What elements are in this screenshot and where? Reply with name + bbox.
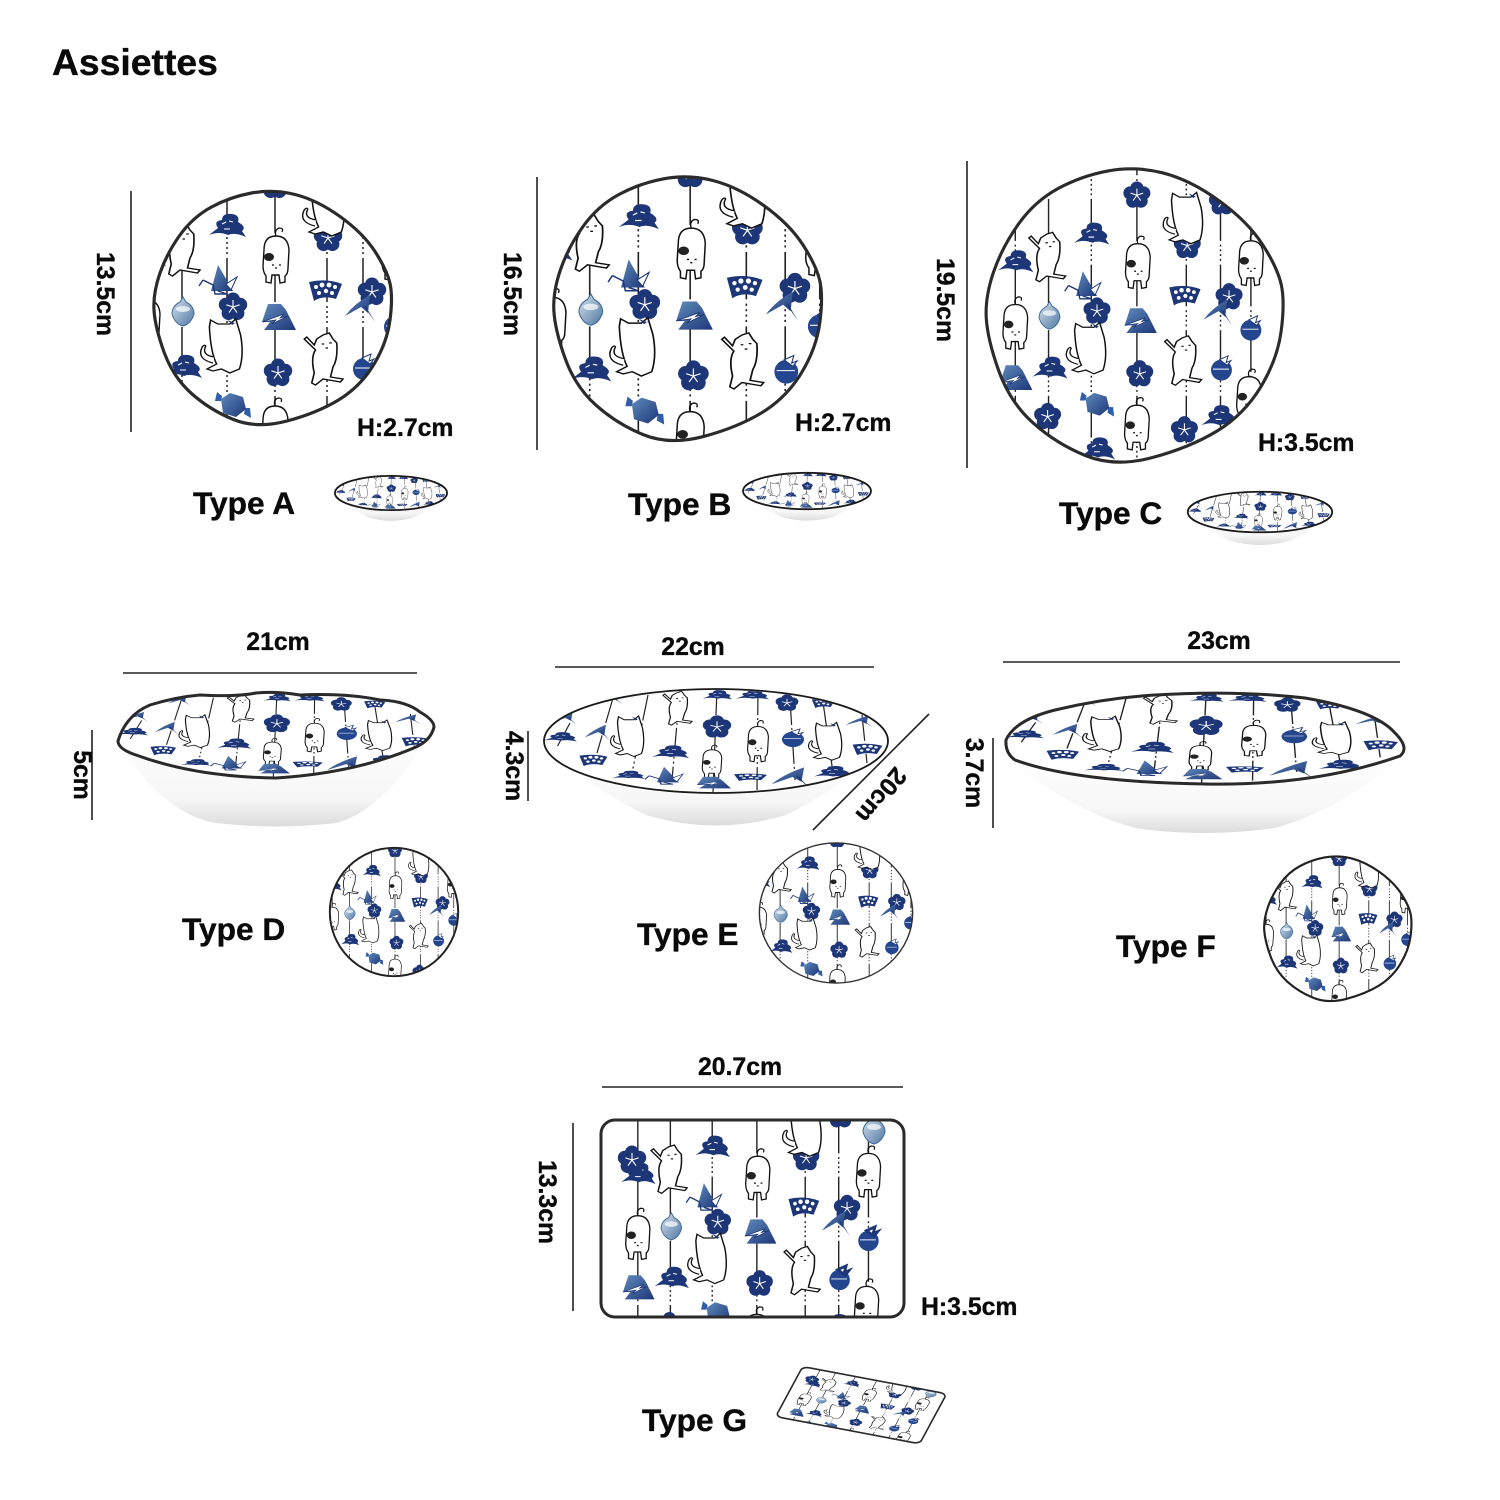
dimension line: 23cm: [1003, 661, 1400, 663]
panel: type E bowl: [506, 637, 930, 984]
plate top view C: [984, 167, 1285, 464]
type label D: Type D: [182, 911, 285, 947]
type label B: Type B: [628, 486, 731, 522]
type label G: Type G: [642, 1402, 747, 1438]
side thumbnail B: [743, 473, 871, 521]
bowl side view E: [544, 689, 888, 826]
type label C: Type C: [1059, 495, 1162, 531]
rectangular plate top view G: [601, 1048, 904, 1402]
panel: type B plate: [504, 175, 890, 522]
dimension label: 13.5cm: 13.5cm: [91, 252, 118, 336]
dimension line: 21cm: [123, 672, 417, 674]
height label A: H:2.7cm: [357, 415, 453, 442]
dimension line: 22cm: [555, 666, 874, 668]
bowl side view F: [1005, 693, 1404, 833]
dimension label: 22cm: 22cm: [661, 634, 725, 661]
dimension line: 19.5cm: [966, 161, 968, 468]
panel: type D bowl: [68, 629, 460, 1005]
type label F: Type F: [1116, 928, 1216, 964]
dimension label: 13.3cm: 13.3cm: [533, 1160, 560, 1244]
dimension line: 13.3cm: [572, 1123, 574, 1311]
height label G: H:3.5cm: [921, 1294, 1017, 1321]
plate top view A: [152, 190, 394, 426]
panel: type F bowl: [966, 631, 1413, 1002]
top thumbnail E: [758, 842, 914, 984]
side thumbnail A: [335, 476, 447, 521]
plate top view B: [552, 175, 824, 442]
dimension label: 23cm: 23cm: [1187, 628, 1251, 655]
bowl side view D: [118, 692, 434, 826]
dimension label: 3.7cm: 3.7cm: [960, 738, 987, 808]
angled thumbnail G: [764, 1348, 956, 1465]
dimension line: 4.3cm: [527, 731, 529, 801]
type label A: Type A: [193, 485, 295, 521]
top thumbnail F: [1263, 855, 1413, 1002]
dimension line: 13.5cm: [130, 191, 132, 432]
title: Assiettes: [52, 41, 218, 83]
side thumbnail C: [1188, 492, 1332, 545]
dimension line: 20cm diagonal: [813, 714, 929, 830]
dimension line: 3.7cm: [992, 738, 994, 828]
dimension label: 20cm: 20cm: [850, 762, 911, 828]
top thumbnail D: [328, 846, 460, 978]
panel: type C plate: [931, 133, 1354, 545]
type label E: Type E: [637, 916, 739, 952]
dimension line: 5cm: [91, 730, 93, 820]
panel: type A plate: [96, 190, 452, 521]
dimension line: 20.7cm: [602, 1086, 903, 1088]
dimension label: 21cm: 21cm: [246, 629, 310, 656]
dimension label: 19.5cm: 19.5cm: [931, 258, 958, 342]
dimension label: 4.3cm: 4.3cm: [500, 731, 527, 801]
height label B: H:2.7cm: [795, 410, 891, 437]
height label C: H:3.5cm: [1258, 430, 1354, 457]
dimension label: 16.5cm: 16.5cm: [498, 252, 525, 336]
panel: type G rectangular plate: [533, 1048, 1017, 1465]
dimension label: 20.7cm: 20.7cm: [698, 1054, 782, 1081]
dimension label: 5cm: 5cm: [68, 750, 95, 800]
dimension line: 16.5cm: [536, 177, 538, 450]
